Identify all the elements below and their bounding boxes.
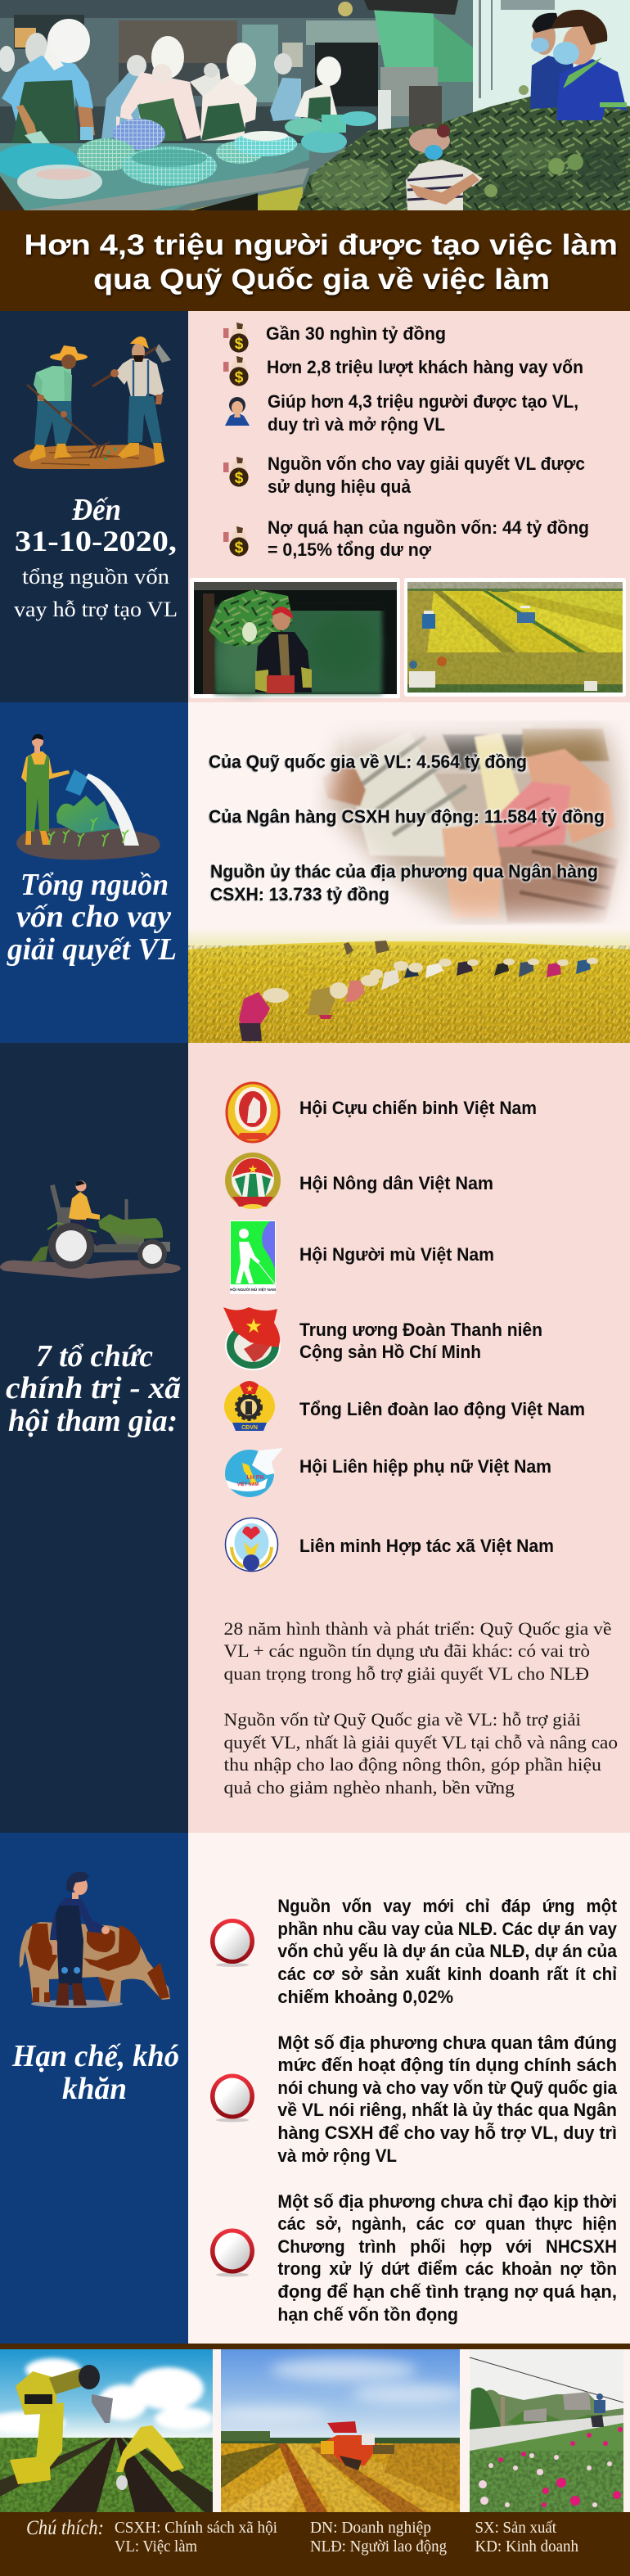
- icon: red circle: [210, 2228, 254, 2277]
- text: limitation two: [277, 2032, 618, 2166]
- paragraph: 28 years: [224, 1618, 612, 1684]
- text: limitation one: phần nhu cầu vay của NLĐ. Các dự án vay: [277, 1919, 618, 1939]
- baskets: [0, 111, 376, 199]
- facts: loan sources: Của Ngân hàng CSXH huy động: 11.584 tỷ đồng: [209, 806, 605, 827]
- legend column one: VL: Việc làm: [115, 2538, 197, 2556]
- text: limitation three: đọng để hạn chế tình trạng nợ quá hạn,: [277, 2281, 617, 2302]
- legend column one: CSXH: Chính sách xã hội: [115, 2519, 277, 2537]
- heading: total loan sources: giải quyết VL: [7, 932, 177, 967]
- paragraph: fund role: Nguồn vốn từ Quỹ Quốc gia về VL: hỗ trợ giải: [224, 1709, 581, 1730]
- photo: farm robots: [0, 2349, 214, 2512]
- icon: money bag: [223, 323, 249, 353]
- text: limitation two: nói chung và cho vay vốn từ Quỹ quốc gia: [277, 2077, 618, 2098]
- icon: money bag: [223, 356, 249, 386]
- organisation name: Tổng Liên đoàn lao động Việt Nam: [299, 1399, 585, 1419]
- title text: [25, 229, 618, 295]
- text: limitation one: chiếm khoảng 0,02%: [277, 1987, 453, 2007]
- photo: flower road: [470, 2349, 623, 2512]
- factory workers: [530, 10, 627, 120]
- heading: limitations: [11, 2039, 179, 2106]
- illustration: two farmers: [13, 336, 171, 469]
- logo: labour confederation: CĐVN: [241, 1425, 258, 1431]
- text: limitation three: Chương trình phối hợp với NHCSXH: [277, 2236, 617, 2257]
- logo: youth union: [223, 1307, 280, 1369]
- text: limitation two: về VL nói riêng, nhất là ủy thác qua Ngân: [277, 2100, 617, 2120]
- logo: farmers union: [225, 1153, 281, 1209]
- fact: overdue debt: Nợ quá hạn của nguồn vốn: 44 tỷ đồng: [268, 517, 589, 538]
- paragraph: 28 years: 28 năm hình thành và phát triển: Quỹ Quốc gia về: [224, 1618, 612, 1639]
- fact: efficiency: Nguồn vốn cho vay giải quyết VL được: [268, 453, 585, 474]
- title text: Hơn 4,3 triệu người được tạo việc làm: [25, 229, 618, 261]
- panel: loan sources: [0, 702, 630, 1043]
- fact: overdue debt: = 0,15% tổng dư nợ: [268, 539, 431, 560]
- heading: date: tổng nguồn vốn: [22, 565, 169, 589]
- title banner: [0, 210, 630, 311]
- green machines: [338, 0, 473, 139]
- paragraph: 28 years: quan trọng trong hỗ trợ giải quyết VL cho NLĐ: [224, 1663, 589, 1684]
- paragraph: fund role: quyết VL, nhất là giải quyết VL tại chỗ và nâng cao: [224, 1732, 618, 1753]
- heading: total loan sources: Tổng nguồn: [20, 868, 169, 902]
- text: limitation one: [277, 1896, 618, 2007]
- fact: total amount: Gần 30 nghìn tỷ đồng: [266, 323, 446, 344]
- legend column two: NLĐ: Người lao động: [310, 2538, 447, 2556]
- fact: efficiency: sử dụng hiệu quả: [268, 476, 412, 497]
- fact: jobs created: Giúp hơn 4,3 triệu người được tạo VL,: [268, 391, 578, 412]
- text: limitation three: Một số địa phương chưa chỉ đạo kịp thời: [277, 2191, 617, 2212]
- organisation name: Cộng sản Hồ Chí Minh: [299, 1342, 481, 1362]
- photo: woman carrying leaves: [190, 578, 400, 698]
- logo: women's union: [225, 1448, 283, 1497]
- legend column one: [115, 2519, 277, 2556]
- figures: [239, 941, 598, 1041]
- heading: seven organisations: 7 tổ chức: [36, 1339, 153, 1374]
- logo: association of the blind: HỘI NGƯỜI MÙ VIỆT NAM: [230, 1286, 276, 1292]
- fact: customers: Hơn 2,8 triệu lượt khách hàng vay vốn: [267, 357, 583, 377]
- logo: women's union: VIỆT NAM: [237, 1481, 259, 1487]
- heading: date: [14, 493, 178, 621]
- heading: limitations: khăn: [62, 2072, 127, 2106]
- text: limitation two: Một số địa phương chưa quan tâm đúng: [277, 2032, 617, 2053]
- text: limitation two: và mở rộng VL: [277, 2145, 397, 2166]
- panel: total capital: [0, 311, 630, 702]
- facts: loan sources: [209, 751, 605, 905]
- workers white: [101, 36, 341, 160]
- tree and farmer: [297, 85, 630, 210]
- legend label: Chú thích:: [26, 2517, 104, 2539]
- organisation name: Trung ương Đoàn Thanh niên: [299, 1320, 542, 1340]
- text: limitation two: mức đến hoạt động tín dụng chính sách: [277, 2055, 617, 2075]
- heading: date: Đến: [71, 493, 121, 527]
- illustration: gardener watering: [16, 734, 160, 859]
- legend column three: SX: Sản xuất: [475, 2519, 556, 2537]
- fact: jobs created: [268, 391, 578, 435]
- panel: limitations: [0, 1833, 630, 2344]
- logo: labour confederation: [224, 1381, 275, 1431]
- heading: date: 31-10-2020,: [15, 525, 177, 557]
- organisation name: Hội Cựu chiến binh Việt Nam: [299, 1098, 537, 1118]
- logo: veterans association: [227, 1083, 279, 1142]
- icon: red circle: [210, 2074, 254, 2122]
- worker blue: [0, 19, 95, 147]
- fact: overdue debt: [268, 517, 589, 560]
- illustration: farmer with cow: [20, 1872, 170, 2008]
- photo: rice field harvest: [404, 578, 626, 697]
- heading: seven organisations: chính trị - xã: [6, 1371, 181, 1405]
- organisation name: [299, 1320, 542, 1362]
- text: limitation one: các cơ sở sản xuất kinh doanh rất ít chỉ: [277, 1964, 617, 1984]
- logo: youth union: ★: [245, 1315, 263, 1338]
- logo: labour confederation: ★: [245, 1384, 254, 1394]
- brown divider: [0, 2344, 630, 2349]
- heading: total loan sources: vốn cho vay: [16, 900, 171, 934]
- text: limitation three: trong xử lý dứt điểm các khoản nợ tồn: [277, 2258, 617, 2279]
- text: limitation three: [277, 2191, 617, 2325]
- title text: qua Quỹ Quốc gia về việc làm: [93, 264, 550, 295]
- legend column three: KD: Kinh doanh: [475, 2538, 578, 2556]
- text: limitation two: hàng CSXH để cho vay hỗ trợ VL, duy trì: [277, 2123, 617, 2143]
- photo: farmers in rice field: [188, 927, 630, 1043]
- fact: jobs created: duy trì và mở rộng VL: [268, 414, 445, 435]
- text: limitation one: vốn chủ yếu là dự án của NLĐ, dự án của: [277, 1941, 618, 1961]
- facts: loan sources: CSXH: 13.733 tỷ đồng: [210, 884, 389, 905]
- photo: rice harvester: [213, 2349, 466, 2512]
- illustration: tractor: [0, 1180, 181, 1279]
- paragraph: fund role: [224, 1709, 618, 1798]
- paragraph: fund role: quả cho giảm nghèo nhanh, bền vững: [224, 1777, 515, 1798]
- paragraph: 28 years: VL + các nguồn tín dụng ưu đãi khác: có vai trò: [224, 1640, 590, 1661]
- icon: money bag: [223, 457, 249, 487]
- bright wall right: [473, 0, 630, 139]
- steel table: [0, 143, 309, 210]
- icon: money bag: [223, 526, 249, 557]
- header photo collage: [0, 0, 630, 210]
- icon: red circle: [210, 1919, 254, 1967]
- logo: women's union: LH PN: [247, 1475, 263, 1481]
- heading: date: vay hỗ trợ tạo VL: [14, 598, 178, 621]
- organisation name: Hội Người mù Việt Nam: [299, 1244, 494, 1265]
- paragraph: fund role: thu nhập cho lao động nông thôn, góp phần hiệu: [224, 1754, 601, 1775]
- facts: loan sources: Của Quỹ quốc gia về VL: 4.564 tỷ đồng: [209, 751, 527, 772]
- legend column three: [475, 2519, 578, 2556]
- logo: farmers union: ★: [248, 1162, 258, 1175]
- heading: seven organisations: [6, 1339, 181, 1438]
- heading: total loan sources: [7, 868, 177, 967]
- heading: seven organisations: hội tham gia:: [8, 1404, 178, 1438]
- icon: person: [225, 397, 250, 426]
- logo: cooperative alliance: [226, 1518, 278, 1572]
- organisation name: Hội Nông dân Việt Nam: [299, 1173, 493, 1193]
- photo: counting money: [311, 720, 630, 925]
- legend column two: DN: Doanh nghiệp: [310, 2519, 431, 2537]
- footer legend: [0, 2512, 630, 2576]
- organisation name: Liên minh Hợp tác xã Việt Nam: [299, 1536, 554, 1556]
- heading: limitations: Hạn chế, khó: [11, 2039, 179, 2073]
- text: limitation three: hạn chế vốn tồn đọng: [277, 2304, 458, 2325]
- panel: participating organisations: [0, 1043, 630, 1833]
- organisation name: Hội Liên hiệp phụ nữ Việt Nam: [299, 1456, 551, 1477]
- fact: efficiency: [268, 453, 585, 497]
- facts: loan sources: Nguồn ủy thác của địa phương qua Ngân hàng: [210, 861, 598, 882]
- logo: association of the blind: [230, 1220, 276, 1294]
- legend column two: [310, 2519, 447, 2556]
